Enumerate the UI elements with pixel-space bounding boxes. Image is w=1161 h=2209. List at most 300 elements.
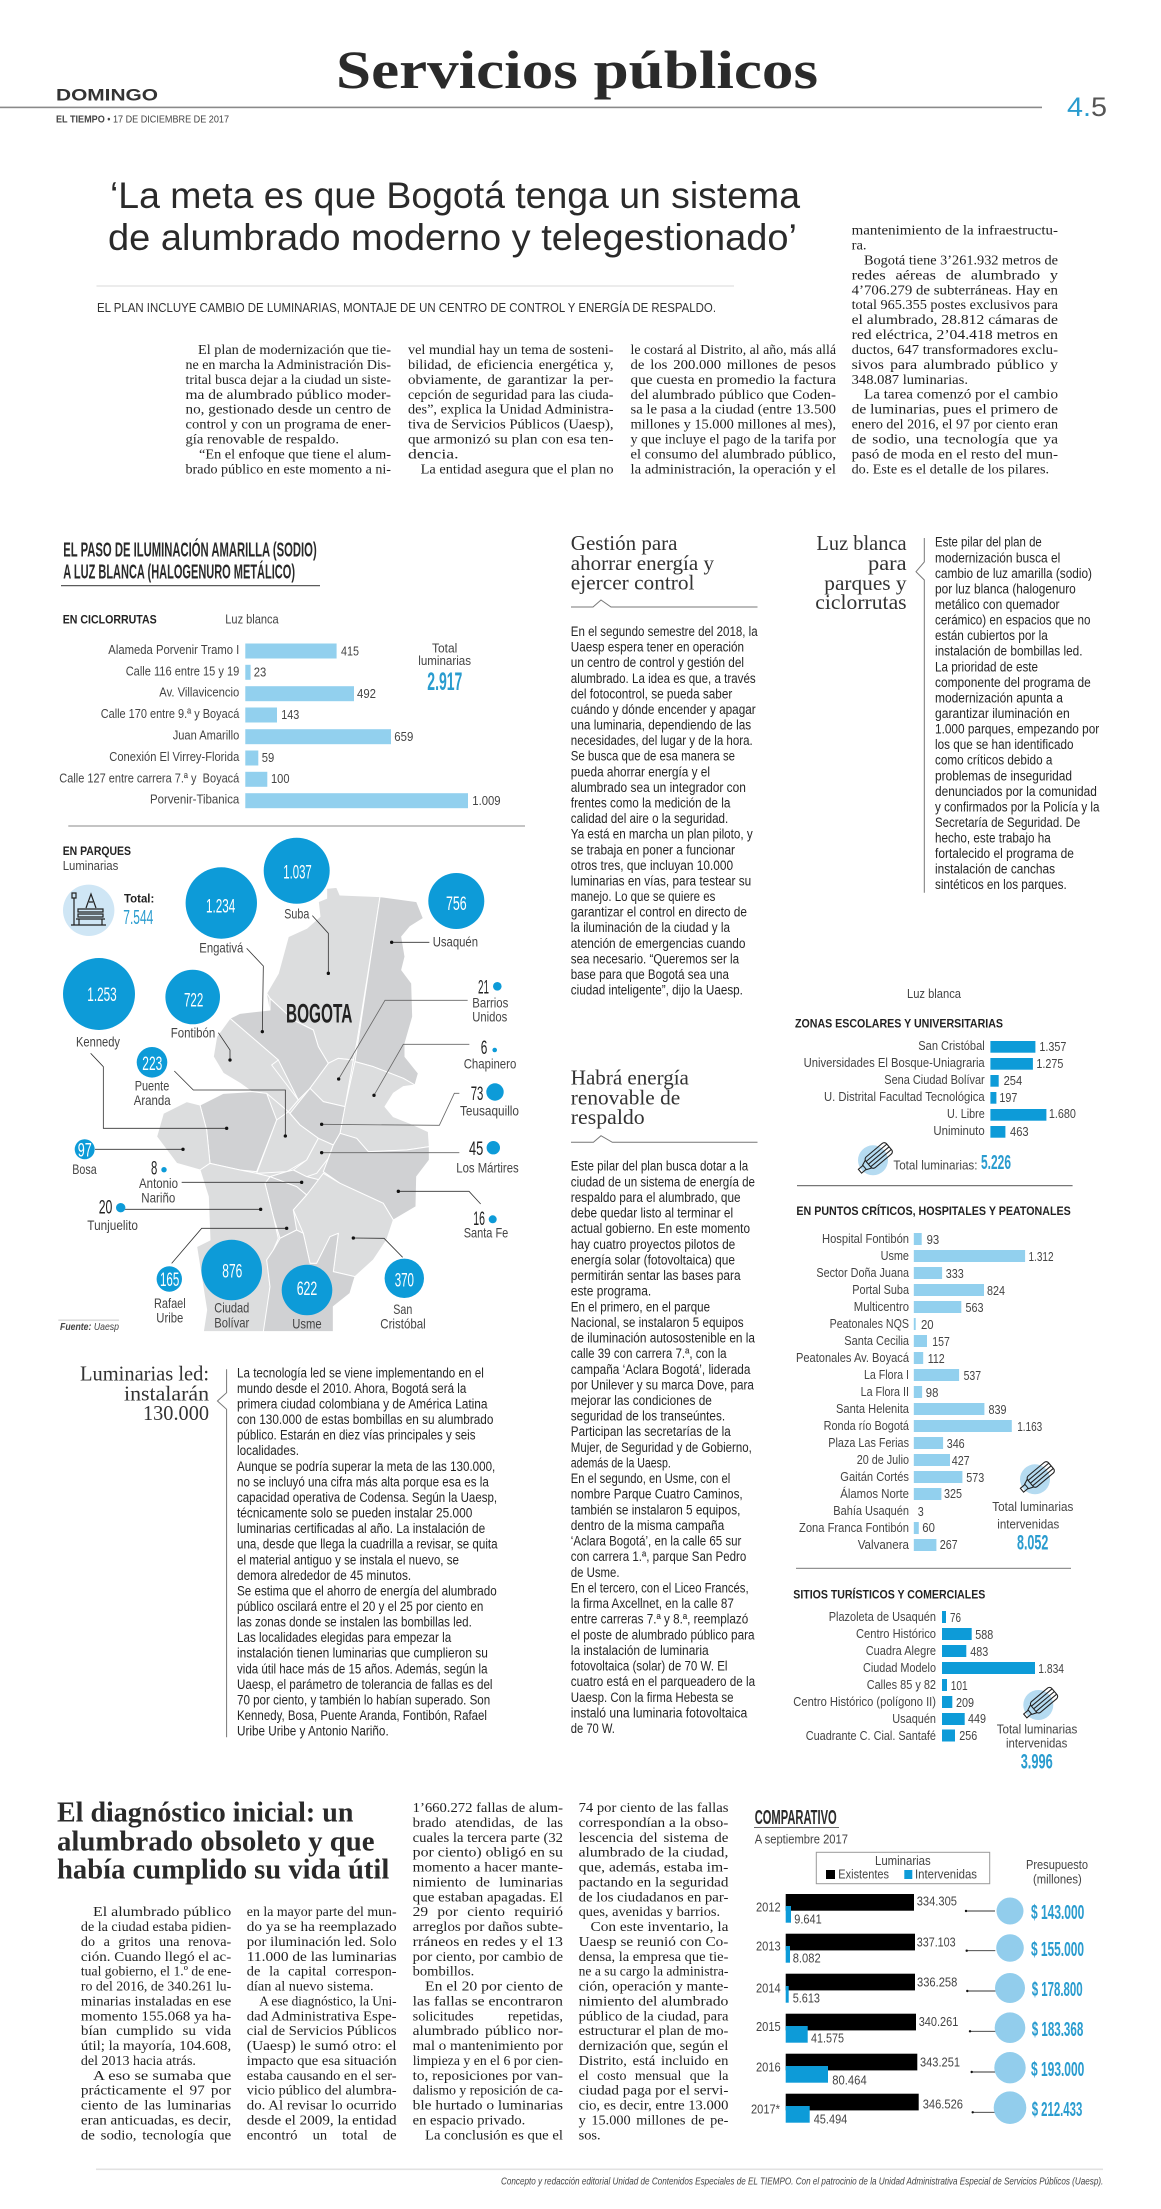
text block: Nacional, se instalaron 5 equipos [571, 1315, 744, 1330]
article: diagnóstico text: eran anticuadas, es decir, [81, 2114, 231, 2128]
text block: alumbrado sea un integrador con [571, 780, 746, 795]
text block: manejo. Lo que se quiere es [571, 889, 716, 904]
article: diagnóstico text: de los ciudadanos en par- [579, 1890, 729, 1905]
intro article text: no, gestionado desde un centro de [186, 403, 391, 418]
text block: instalación tienen luminarias que cumplieron su [237, 1646, 488, 1661]
locality labels: Rafael [154, 1295, 186, 1311]
article: diagnóstico text: alumbrado de la ciudad, [579, 1846, 728, 1861]
total callout: 3.996 [1021, 1750, 1053, 1773]
text block: ciudad de un sistema de energía de [571, 1174, 755, 1189]
locality labels: Suba [284, 905, 309, 921]
article: diagnóstico text: Distrito, está incluido en [579, 2054, 728, 2069]
total callout: Total luminarias: [893, 1158, 978, 1172]
panel: luminarias led [80, 1362, 498, 1739]
bar chart: zonas escolares y universitarias: 254 [1004, 1074, 1022, 1088]
intro article text: redes aéreas de alumbrado y [852, 268, 1058, 283]
bar chart: puntos críticos: 346 [947, 1437, 965, 1451]
bar chart: ciclorrutas: 59 [262, 751, 274, 765]
article: diagnóstico text: alumbrado público nor- [413, 2024, 563, 2039]
parks heading: EN PARQUES [63, 844, 131, 858]
text block: de 70 W. [571, 1721, 615, 1736]
text block: frentes como la medición de la [571, 796, 731, 810]
bar chart: puntos críticos: 839 [988, 1403, 1007, 1417]
intro article text: dencia. [408, 447, 458, 462]
intro article text: de luminarias, pues el primero de [852, 403, 1058, 418]
bar chart: puntos críticos: Usme [881, 1249, 909, 1263]
bar values: 41.575 [811, 2032, 844, 2046]
text block: una, desde que llega la cuadrilla a revisar, se quita [237, 1537, 498, 1552]
bubble values: 73 [471, 1083, 483, 1105]
text block: Este pilar del plan busca dotar a la [571, 1159, 749, 1174]
bar chart: sitios turísticos y comerciales: 101 [951, 1679, 968, 1693]
locality labels: Unidos [472, 1009, 507, 1025]
text block: el poste de alumbrado público para [571, 1627, 755, 1642]
text block [237, 1365, 498, 1739]
text block: público. Estarán en diez vías principales y seis [237, 1428, 476, 1443]
article: diagnóstico text: estructurar el plan de mo- [579, 2024, 729, 2039]
total parks: 7.544 [123, 907, 153, 929]
intro article text: La tarea comenzó por el cambio [864, 388, 1058, 403]
intro article text: control y con un programa de ener- [186, 418, 391, 433]
article: diagnóstico text: y 15.000 millones de pe- [579, 2114, 729, 2128]
text block: actual gobierno. En este momento [571, 1221, 750, 1236]
bar chart: ciclorrutas: 492 [357, 687, 376, 701]
bubble values [78, 861, 489, 1300]
bubble values: 8 [151, 1158, 157, 1180]
intro article text: tiva de Servicios Públicos (Uaesp), [408, 418, 614, 433]
article: diagnóstico text: nimiento de luminarias [413, 1875, 563, 1890]
total callout [893, 1152, 1011, 1174]
locality labels: San [393, 1301, 412, 1317]
icon: park bench [63, 885, 114, 936]
heading: ciclorrutas [815, 590, 907, 614]
article: diagnóstico text [81, 1801, 729, 2143]
year labels: 2015 [756, 2020, 781, 2034]
heading [815, 531, 924, 893]
heading: 130.000 [143, 1401, 209, 1425]
bar chart: puntos críticos: Peatonales NQS [830, 1317, 909, 1331]
bar chart: ciclorrutas: 1.009 [472, 794, 501, 808]
article: diagnóstico text: ques, avenidas y barrios. [579, 1905, 720, 1920]
title: Servicios públicos [336, 40, 818, 100]
article: diagnóstico text: ble hurtado o luminarias [413, 2099, 563, 2114]
article: diagnóstico text: arreglos por daños subte- [413, 1920, 563, 1935]
intro article text: Bogotá tiene 3’261.932 metros de [864, 253, 1058, 268]
bar chart: puntos críticos: Portal Suba [852, 1283, 909, 1297]
text block: modernización busca el [935, 550, 1060, 565]
bar chart: puntos críticos: 157 [932, 1335, 950, 1349]
bars: intervenidas [786, 1906, 828, 2123]
intro article text: el consumo del alumbrado público, [630, 447, 836, 462]
text block: no se incluyó una cifra más alta porque esa es la [237, 1474, 489, 1489]
text block [571, 624, 758, 998]
bar chart: puntos críticos: 824 [987, 1284, 1005, 1298]
article: diagnóstico text: cial de Servicios Públicos [247, 2024, 397, 2039]
article: diagnóstico text: que estaban apagadas. El [413, 1890, 563, 1905]
article: diagnóstico text: 11.000 de las luminarias [247, 1950, 397, 1965]
parks heading: Luminarias [63, 859, 118, 873]
text block: Uaesp. Con la firma Hebesta se [571, 1690, 734, 1705]
article: diagnóstico text: cio, es decir, entre 13.000 [579, 2099, 728, 2114]
text block: Aunque se podría superar la meta de las 130.000, [237, 1459, 495, 1474]
bar chart: zonas escolares y universitarias: Universidades El Bosque-Uniagraria [804, 1056, 985, 1070]
intro article text: pasó de moda en el resto del mun- [852, 447, 1058, 462]
bar chart: zonas escolares y universitarias: Uniminuto [933, 1124, 985, 1138]
text block: instalación de canchas [935, 862, 1055, 877]
text block: otros tres, que incluyan 10.000 [571, 858, 733, 873]
bar chart: ciclorrutas: Av. Villavicencio [159, 686, 239, 700]
text block [571, 1159, 756, 1736]
bar chart: puntos críticos: Zona Franca Fontibón [799, 1521, 909, 1535]
bar chart: puntos críticos: Álamos Norte [840, 1486, 909, 1501]
article: diagnóstico text: solicitudes repetidas, [413, 2009, 563, 2024]
text block: En el primero, en el parque [571, 1299, 710, 1314]
total callout: 2.917 [427, 668, 462, 696]
bubble values: 21 [478, 976, 489, 998]
bar chart: puntos críticos: 3 [918, 1505, 924, 1519]
budget values [1031, 1902, 1084, 2121]
bar chart: zonas escolares y universitarias: U. Distrital Facultad Tecnológica [824, 1090, 985, 1104]
article: diagnóstico text: correspondían a la obso- [579, 1816, 729, 1831]
text block: hecho, este trabajo ha [935, 830, 1051, 846]
bar chart: sitios turísticos y comerciales: 1.834 [1038, 1662, 1064, 1676]
text block: garantizar el control en directo de [571, 905, 747, 920]
total callout: luminarias [418, 654, 471, 668]
article: diagnóstico text: el costo mensual que la [579, 2069, 729, 2084]
bar chart: puntos críticos: Santa Helenita [836, 1402, 909, 1416]
intro article text: red eléctrica, 2’04.418 metros en [852, 328, 1058, 343]
article: diagnóstico text: por ciento, por cambio de [413, 1950, 563, 1965]
bar chart: ciclorrutas: Juan Amarillo [173, 729, 239, 743]
intro article text: 4’706.279 de subterráneas. Hay en [852, 283, 1058, 298]
bar chart: zonas escolares y universitarias: Sena Ciudad Bolívar [884, 1073, 985, 1087]
bar chart: puntos críticos: 333 [946, 1267, 964, 1281]
text block: La tecnología led se viene implementando en el [237, 1365, 484, 1380]
bar chart: sitios turísticos y comerciales: Ciudad Modelo [863, 1661, 936, 1675]
locality labels: Los Mártires [456, 1159, 519, 1175]
bubble values: 622 [297, 1278, 317, 1300]
text block: En el tercero, con el Liceo Francés, [571, 1580, 749, 1595]
total callout: Total [432, 641, 457, 655]
article: diagnóstico text: minarias instaladas en ese [81, 1994, 231, 2009]
locality labels: Nariño [141, 1190, 175, 1206]
heading: chart section: EL PASO DE ILUMINACIÓN AMARILLA (SODIO) [63, 538, 317, 562]
text block: un centro de control y gestión del [571, 655, 744, 670]
article: diagnóstico text: de sodio, tecnología que [81, 2128, 231, 2143]
bar chart: puntos críticos: La Flora II [861, 1385, 909, 1399]
article: diagnóstico text: pactando en la seguridad [579, 1875, 728, 1890]
bar chart: puntos críticos: Multicentro [854, 1300, 909, 1314]
text block: cuatro está en el parqueadero de la [571, 1674, 756, 1689]
text block: garantizar iluminación en [935, 706, 1070, 721]
intro article text: ne en marcha la Administración Dis- [186, 358, 391, 373]
bar values: 334.305 [917, 1895, 957, 1909]
bar chart: puntos críticos [796, 1203, 1073, 1554]
bar values: 5.613 [793, 1992, 820, 2006]
text block: la firma Axcellnet, en la calle 87 [571, 1596, 734, 1611]
bar chart: sitios turísticos y comerciales: Calles 85 y 82 [867, 1678, 936, 1692]
heading: parques y [824, 571, 907, 595]
text block: calidad del aire o la seguridad. [571, 811, 728, 826]
article: diagnóstico text: impacto que esa situación [247, 2054, 397, 2069]
leader lines [91, 916, 481, 1263]
map: Bogotá localities [157, 887, 429, 1332]
bars: existentes [786, 1894, 919, 2110]
total parks: Total: [124, 892, 154, 906]
article: diagnóstico text: lescencia del sistema de [579, 1831, 728, 1846]
legend: Intervenidas [915, 1868, 977, 1882]
locality labels: Engativá [199, 939, 243, 955]
text block: ciudad inteligente”, dijo la Uaesp. [571, 983, 743, 998]
budget heading [1026, 1858, 1088, 1886]
article: diagnóstico text: do ya se ha reemplazado [247, 1920, 397, 1935]
text block: debe quedar listo al terminar el [571, 1206, 733, 1221]
text block: La prioridad de este [935, 659, 1038, 674]
parks heading [63, 844, 131, 873]
article: diagnóstico text: limpieza y en el 6 por cien- [413, 2054, 563, 2069]
text block: energía solar (fotovoltaica) que [571, 1252, 735, 1267]
text block: entre carreras 7.ª y 8.ª, reemplazó [571, 1612, 748, 1627]
text block: mejorar las condiciones de [571, 1393, 712, 1408]
page number: 4.5 [1067, 92, 1107, 122]
budget values: $ 193.000 [1031, 2059, 1084, 2081]
heading: Luminarias led: [80, 1362, 209, 1386]
text block [935, 535, 1100, 892]
locality labels: Cristóbal [380, 1316, 426, 1332]
budget values: $ 212.433 [1032, 2099, 1082, 2121]
intro article text: do. Este es el detalle de los pilares. [852, 462, 1049, 477]
text block: este programa. [571, 1284, 651, 1299]
locality labels: Santa Fe [464, 1225, 508, 1241]
text block: de Usme. [571, 1565, 620, 1580]
bar chart: puntos críticos: Santa Cecilia [844, 1334, 909, 1348]
text block: con 130.000 de estas bombillas en su alumbrado [237, 1412, 493, 1427]
text block: hay cuatro proyectos pilotos de [571, 1237, 735, 1252]
text block: Secretaría de Seguridad. De [935, 815, 1080, 830]
article: diagnóstico text: sos. [579, 2128, 601, 2143]
heading [571, 531, 758, 607]
heading: Habrá energía [571, 1065, 689, 1089]
intro article text: ra. [852, 238, 867, 254]
text block: permitirán sentar las bases para [571, 1268, 741, 1283]
text block: una luminaria, dependiendo de las [571, 718, 751, 732]
year labels: 2016 [756, 2061, 781, 2075]
legend [816, 1852, 990, 1884]
bar values: 9.641 [794, 1913, 822, 1927]
bar chart: ciclorrutas: 659 [394, 730, 413, 744]
article: diagnóstico text: desde el 2009, la entidad [247, 2114, 397, 2128]
bar chart: puntos críticos: EN PUNTOS CRÍTICOS, HOSPITALES Y PEATONALES [796, 1203, 1071, 1218]
locality labels: Bosa [72, 1161, 97, 1177]
bar chart: puntos críticos: 427 [952, 1454, 970, 1468]
subheading: EL PLAN INCLUYE CAMBIO DE LUMINARIAS, MONTAJE DE UN CENTRO DE CONTROL Y ENERGÍA DE RESPALDO. [97, 300, 716, 315]
bar values: 8.082 [793, 1952, 821, 1966]
locality labels: Usaquén [433, 934, 478, 950]
text block: 70 por ciento, y también lo habían superado. Son [237, 1692, 490, 1708]
intro article text: y que incluye el pago de la tarifa por [630, 432, 836, 448]
total callout [997, 1722, 1077, 1773]
locality labels: Barrios [472, 994, 508, 1010]
article: diagnóstico text: nimiento del alumbrado [579, 1994, 728, 2009]
text block: público oscilará entre el 20 y el 25 por ciento en [237, 1599, 483, 1614]
article: diagnóstico text: brado atendidas, de las [413, 1816, 563, 1831]
bar chart: puntos críticos: 20 de Julio [857, 1453, 909, 1467]
heading [80, 1362, 227, 1737]
bubble values: 876 [222, 1261, 242, 1283]
main headline: de alumbrado moderno y telegestionado’ [108, 217, 797, 258]
text block: 1.000 parques, empezando por [935, 722, 1100, 736]
bar values: 340.261 [919, 2015, 958, 2029]
text block: primera ciudad colombiana y de América Latina [237, 1396, 488, 1412]
article: diagnóstico text: cuales la tercera parte (32 [413, 1831, 563, 1846]
text block: demora alrededor de 45 minutos. [237, 1568, 411, 1583]
locality labels: Kennedy [76, 1034, 120, 1050]
main headline: ‘La meta es que Bogotá tenga un sistema [110, 175, 800, 216]
article: diagnóstico text: ciudad paga por el servi- [579, 2084, 729, 2099]
article: diagnóstico text: Con este inventario, la [590, 1920, 729, 1935]
intro article text: “En el enfoque que tiene el alum- [199, 447, 391, 462]
panel: gestión [571, 531, 758, 998]
text block: Uaesp, el parámetro de tolerancia de fallas es del [237, 1677, 493, 1692]
year labels: 2013 [756, 1939, 781, 1953]
article: diagnóstico text: dad Administrativa Espe- [247, 2009, 397, 2024]
heading [571, 1065, 758, 1142]
heading [754, 1807, 848, 1846]
article: diagnóstico text: mal o mantenimiento por [413, 2039, 563, 2054]
bar chart: sitios turísticos y comerciales: 256 [959, 1729, 977, 1743]
text block: Ya está en marcha un plan piloto, y [571, 827, 753, 842]
article: diagnóstico text: dían al nuevo sistema. [247, 1980, 374, 1995]
bar chart: ciclorrutas: Calle 170 entre 9.ª y Boyacá [101, 707, 239, 721]
article: diagnóstico text: El alumbrado público [93, 1905, 231, 1920]
main headline [108, 175, 800, 258]
bubble values: 20 [99, 1196, 112, 1218]
text block: Uribe Uribe y Antonio Nariño. [237, 1724, 389, 1739]
article: diagnóstico text: En el 20 por ciento de [425, 1980, 563, 1995]
text block: Mujer, de Seguridad y de Gobierno, [571, 1440, 752, 1455]
bar values: 346.526 [923, 2098, 963, 2112]
article: diagnóstico text: por iluminación led. Solo [247, 1935, 397, 1950]
year labels: 2014 [756, 1981, 781, 1995]
bubble values: 1.037 [283, 861, 312, 883]
total callout [418, 641, 471, 696]
text block: componente del programa de [935, 675, 1091, 690]
text block: también se instalaron 5 equipos, [571, 1502, 740, 1517]
text block: técnicamente solo se pueden instalar 25.000 [237, 1506, 472, 1520]
bar chart: puntos críticos: Peatonales Av. Boyacá [796, 1351, 909, 1365]
bar chart: zonas escolares y universitarias: 197 [999, 1091, 1017, 1105]
text block: fortalecido el programa de [935, 846, 1074, 861]
bubble values: 1.234 [206, 895, 235, 917]
article: diagnóstico text: bombillos. [413, 1965, 474, 1980]
bar chart: sitios turísticos y comerciales: 76 [950, 1611, 961, 1625]
text block: por Unilever y su marca Dove, para [571, 1377, 754, 1392]
text block: con carrera 1.ª, parque San Pedro [571, 1549, 746, 1564]
bar chart: puntos críticos: Sector Doña Juana [816, 1266, 909, 1280]
text block: dentro de la misma campaña [571, 1518, 725, 1533]
year labels [751, 1901, 781, 2116]
intro article text: ductos, 647 transformadores exclu- [852, 343, 1058, 358]
city label: BOGOTA [286, 998, 352, 1028]
text block: En el segundo semestre del 2018, la [571, 624, 758, 639]
bar chart: sitios turísticos y comerciales: SITIOS TURÍSTICOS Y COMERCIALES [793, 1586, 985, 1601]
heading: para [868, 551, 907, 575]
panel: luz blanca [815, 531, 1100, 893]
article: diagnóstico text: do. Al revisar lo ocurrido [247, 2099, 397, 2114]
text block: Las localidades elegidas para empezar la [237, 1630, 452, 1645]
connectors [965, 1910, 997, 2114]
text block: además de la Uaesp. [571, 1456, 671, 1470]
section label: DOMINGO [56, 86, 158, 105]
intro article text: obviamente, de garantizar la per- [408, 373, 614, 388]
bar chart: ciclorrutas: 100 [271, 772, 290, 786]
intro article text: el alumbrado, 28.812 cámaras de [852, 313, 1058, 328]
total callout: 8.052 [1017, 1531, 1048, 1554]
text block: instalación de bombillas led. [935, 644, 1082, 659]
total callout: 5.226 [981, 1152, 1011, 1174]
budget circles [994, 1898, 1026, 2124]
article: diagnóstico text: momento a hacer mante- [413, 1860, 563, 1876]
bar chart: puntos críticos: 98 [926, 1386, 938, 1400]
text block: necesidades, del lugar y de la hora. [571, 733, 753, 748]
bar chart: ciclorrutas: Conexión El Virrey-Florida [109, 750, 239, 764]
bar chart: ciclorrutas: Calle 127 entre carrera 7.ª y Boyacá [59, 771, 239, 785]
heading: chart section [61, 538, 320, 586]
locality labels: Teusaquillo [460, 1103, 519, 1119]
heading: el diagnóstico inicial: había cumplido su vida útil [57, 1854, 389, 1886]
article: diagnóstico text: encontró un total de [247, 2128, 397, 2143]
bar chart: sitios turísticos y comerciales [793, 1586, 1077, 1773]
article: diagnóstico text: ciento de las luminarias [81, 2099, 231, 2114]
bubble values: 756 [446, 893, 467, 915]
bubble values: 97 [78, 1140, 92, 1162]
article: diagnóstico text: do a gritos una renova- [81, 1935, 232, 1950]
text block: modernización apunta a [935, 690, 1063, 705]
article: diagnóstico text: to, reposiciones por van- [413, 2069, 563, 2084]
intro article text: sivos para alumbrado público y [852, 358, 1058, 373]
bar chart: puntos críticos: 1.312 [1028, 1250, 1054, 1264]
article: diagnóstico text: 74 por ciento de las fallas [579, 1801, 728, 1816]
bubble values: 223 [142, 1053, 162, 1075]
text block: las zonas donde se instalen las bombillas led. [237, 1615, 472, 1630]
article: diagnóstico text: Uaesp se reunió con Co- [579, 1935, 729, 1950]
bar chart: sitios turísticos y comerciales: 588 [975, 1628, 993, 1642]
budget values: $ 178.800 [1032, 1979, 1083, 2001]
bar chart: puntos críticos: Gaitán Cortés [840, 1470, 909, 1484]
icon: bulb [1021, 1686, 1059, 1721]
legend label: luz blanca: Luz blanca [907, 987, 961, 1001]
text block: sea necesario. “Queremos ser la [571, 951, 740, 966]
text block: Se busca que de esa manera se [571, 749, 735, 764]
bar chart: puntos críticos: Bahía Usaquén [833, 1504, 909, 1518]
text block: de iluminación autosostenible en la [571, 1330, 755, 1346]
text block: sintéticos en los parques. [935, 877, 1067, 892]
bar values: 80.464 [832, 2074, 867, 2088]
text block: cuándo y dónde encender y apagar [571, 702, 756, 717]
intro article text: del alumbrado público que Coden- [630, 388, 836, 403]
article: diagnóstico text: A ese diagnóstico, la Uni- [259, 1994, 397, 2009]
intro article text: mantenimiento de la infraestructu- [852, 224, 1058, 239]
heading: el diagnóstico inicial: El diagnóstico inicial: un [57, 1797, 353, 1829]
article: diagnóstico text: prácticamente el 97 por [81, 2084, 232, 2099]
text block: Kennedy, Bosa, Puente Aranda, Fontibón, Rafael [237, 1708, 487, 1723]
bar chart: sitios turísticos y comerciales: Plazoleta de Usaquén [829, 1610, 936, 1624]
heading: respaldo [571, 1105, 645, 1129]
bar chart: zonas escolares y universitarias: 1.275 [1036, 1057, 1063, 1071]
heading: instalarán [124, 1382, 209, 1406]
intro article text: vel mundial hay un tema de sosteni- [408, 343, 614, 358]
heading: renovable de [571, 1085, 680, 1109]
